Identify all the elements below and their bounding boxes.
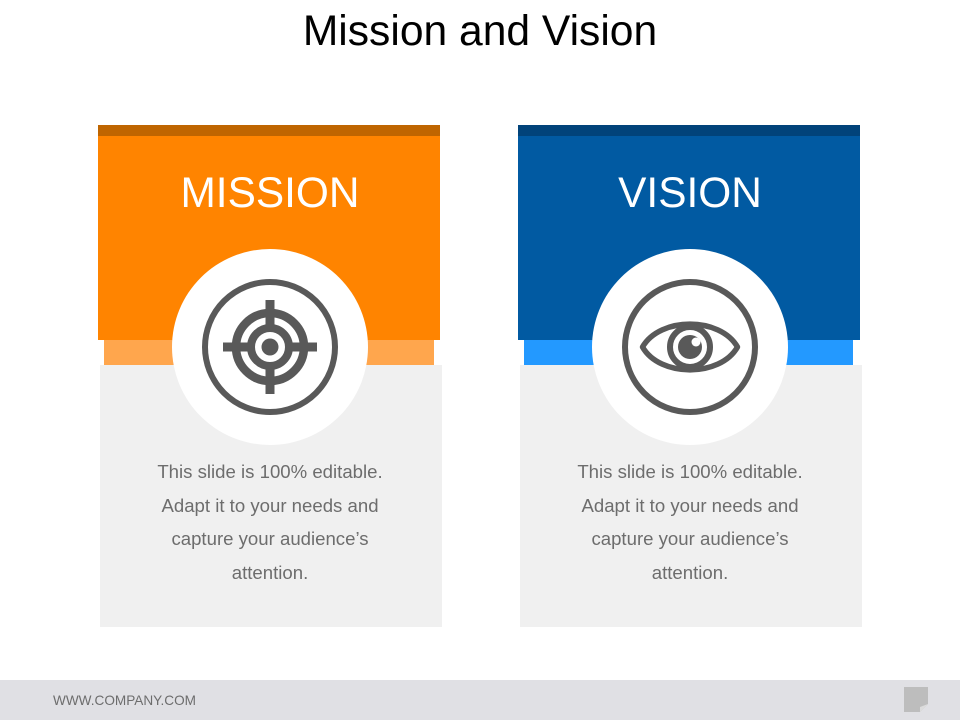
mission text bbox=[157, 461, 383, 583]
mission light orange band bbox=[104, 340, 434, 365]
mission dark top strip bbox=[98, 125, 440, 136]
title: Mission and Vision bbox=[303, 7, 657, 55]
mission header bar bbox=[98, 125, 440, 340]
panel: vision bbox=[518, 125, 862, 627]
vision light blue band bbox=[524, 340, 853, 365]
footer bar bbox=[0, 680, 960, 720]
footer url: WWW.COMPANY.COM bbox=[53, 693, 196, 708]
mission text: capture your audience’s bbox=[171, 528, 369, 549]
vision text bbox=[577, 461, 803, 583]
vision text: capture your audience’s bbox=[591, 528, 789, 549]
mission heading: MISSION bbox=[180, 169, 360, 216]
vision text: attention. bbox=[652, 562, 728, 583]
vision header bar bbox=[518, 125, 860, 340]
footer icon: page bbox=[904, 687, 928, 712]
vision text background bbox=[520, 365, 862, 627]
mission text: Adapt it to your needs and bbox=[161, 495, 379, 516]
vision text: This slide is 100% editable. bbox=[577, 461, 803, 482]
mission text background bbox=[100, 365, 442, 627]
mission text: attention. bbox=[232, 562, 308, 583]
vision icon: eye bbox=[592, 249, 788, 445]
mission text: This slide is 100% editable. bbox=[157, 461, 383, 482]
vision text: Adapt it to your needs and bbox=[581, 495, 799, 516]
vision dark top strip bbox=[518, 125, 860, 136]
panel: mission bbox=[98, 125, 442, 627]
vision heading: VISION bbox=[618, 169, 762, 216]
mission icon: target bbox=[172, 249, 368, 445]
